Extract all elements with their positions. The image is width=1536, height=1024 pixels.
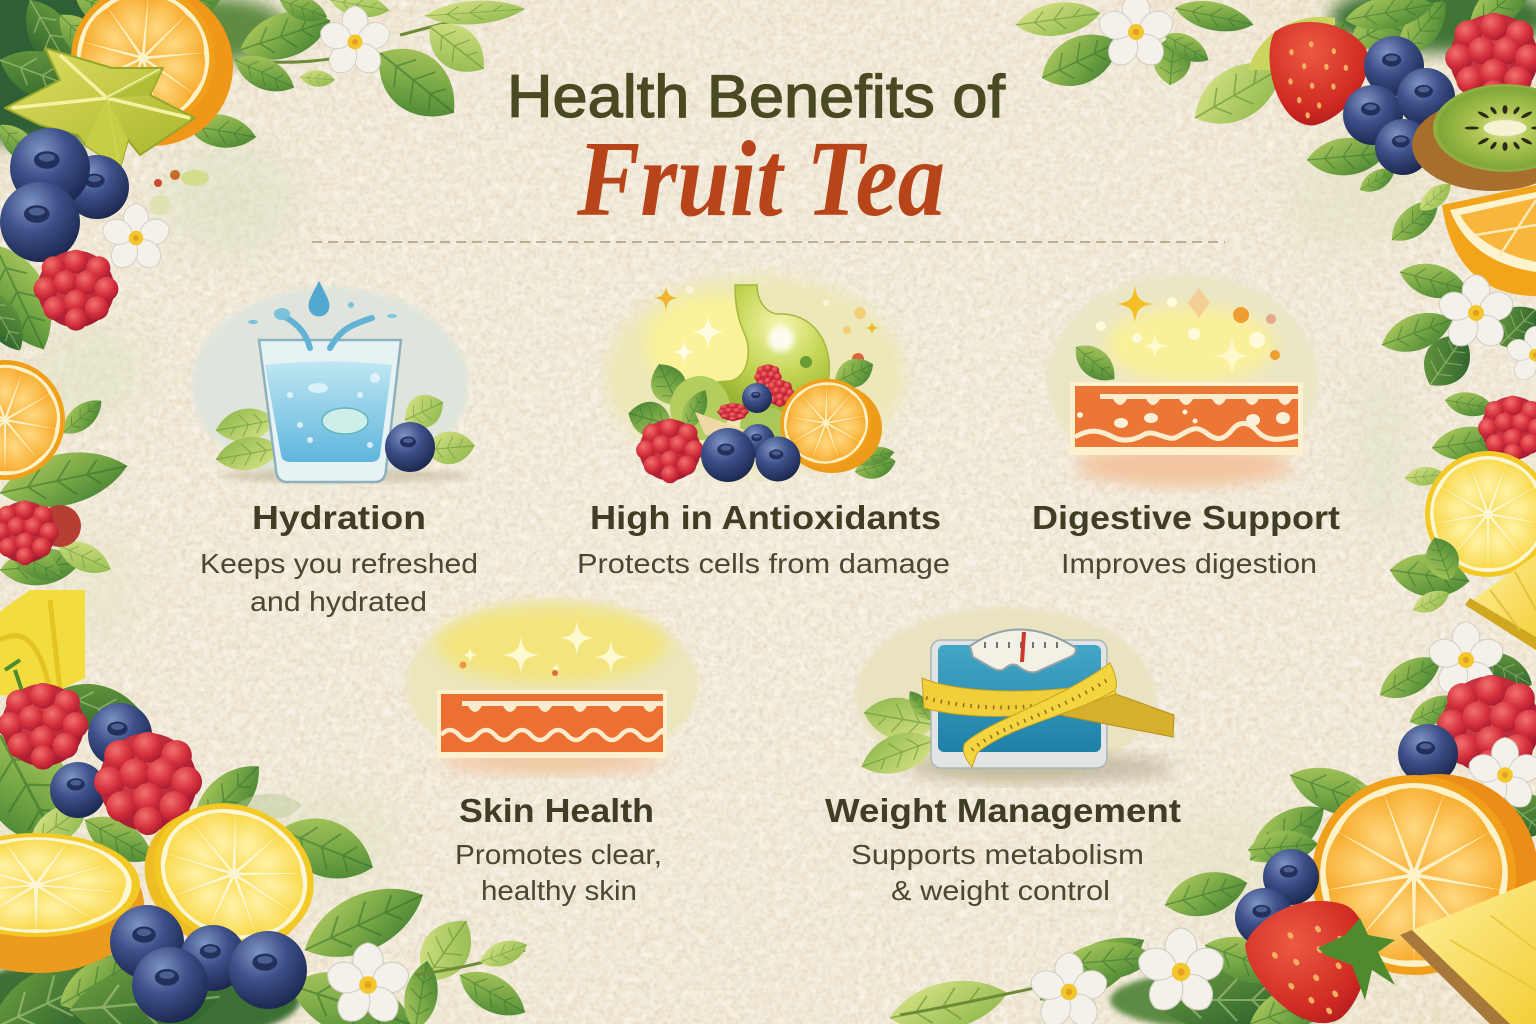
fruit: bottom left — [0, 778, 534, 1024]
description: weight management: & weight control — [891, 875, 1110, 906]
foliage and fruit: right side — [1372, 389, 1536, 850]
icon: skin layer — [406, 599, 698, 774]
fruit: left side — [0, 360, 202, 835]
benefit: hydration — [192, 281, 478, 617]
benefit: weight management — [825, 607, 1181, 906]
icon: intestinal lining — [1047, 274, 1319, 486]
heading: skin health: Skin Health — [459, 792, 654, 829]
heading: digestive support: Digestive Support — [1032, 499, 1340, 536]
foliage: top left — [0, 0, 526, 518]
description: skin health: Promotes clear, — [455, 839, 662, 870]
heading: weight management: Weight Management — [825, 792, 1181, 829]
description: hydration: and hydrated — [250, 586, 427, 617]
icon: scale with tape measure — [855, 607, 1175, 784]
benefit: antioxidants — [577, 275, 950, 579]
foliage: left side — [0, 533, 485, 993]
foliage: top right — [1014, 0, 1536, 398]
description: skin health: healthy skin — [481, 875, 637, 906]
fruit: top right — [1266, 13, 1536, 384]
heading: antioxidants: High in Antioxidants — [590, 499, 941, 536]
benefit: digestive support — [1032, 274, 1340, 579]
fruit: top left berries — [0, 128, 209, 331]
description: digestive support: Improves digestion — [1061, 548, 1317, 579]
title — [507, 63, 1005, 239]
fruit: bottom right — [885, 755, 1536, 1024]
heading: hydration: Hydration — [252, 499, 426, 536]
icon: stomach with fruit — [605, 275, 905, 483]
description: hydration: Keeps you refreshed — [200, 548, 478, 579]
description: weight management: Supports metabolism — [851, 839, 1144, 870]
description: antioxidants: Protects cells from damage — [577, 548, 950, 579]
title line 2: script: Fruit Tea — [576, 120, 945, 239]
benefit: skin health — [406, 599, 698, 906]
icon: glass of water — [192, 281, 476, 483]
fruit: top left orange and star fruit — [5, 0, 233, 168]
title line 1: Health Benefits of — [507, 63, 1005, 130]
